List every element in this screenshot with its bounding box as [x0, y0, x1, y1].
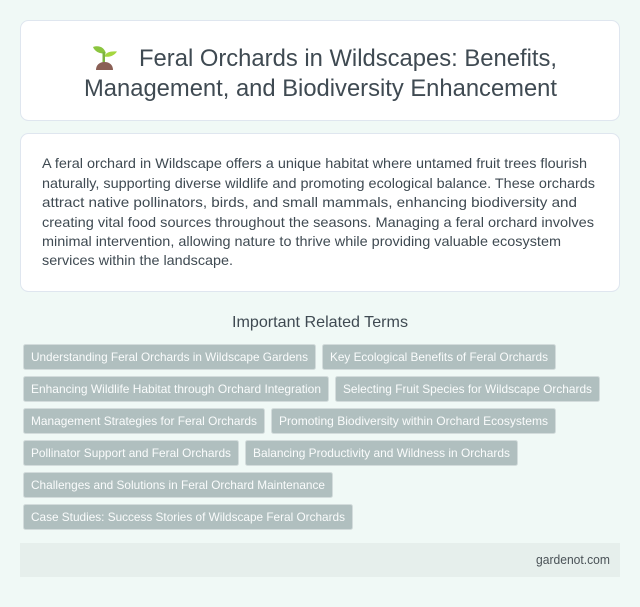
title — [84, 45, 557, 102]
panel: title card — [20, 20, 620, 120]
tag — [24, 376, 328, 402]
tag: Case Studies: Success Stories of Wildscape Feral Orchards — [31, 510, 345, 524]
tag: Key Ecological Benefits of Feral Orchards — [330, 350, 548, 364]
text block: description: services within the landscape. — [42, 252, 233, 268]
title: Management, and Biodiversity Enhancement — [84, 75, 557, 102]
tag: Balancing Productivity and Wildness in Orchards — [253, 446, 510, 460]
tag: Challenges and Solutions in Feral Orchard Maintenance — [31, 478, 325, 492]
heading: related terms: Important Related Terms — [232, 314, 408, 331]
panel: description — [20, 134, 620, 292]
tag — [24, 440, 238, 466]
title: Feral Orchards in Wildscapes: Benefits, — [139, 45, 557, 72]
tag: Selecting Fruit Species for Wildscape Orchards — [343, 382, 592, 396]
tag: Management Strategies for Feral Orchards — [31, 414, 257, 428]
text block: description: minimal intervention, allowing nature to thrive while providing valuable ecosystem — [42, 233, 561, 249]
tag — [272, 408, 556, 434]
tag: Promoting Biodiversity within Orchard Ecosystems — [279, 414, 548, 428]
tag: Pollinator Support and Feral Orchards — [31, 446, 231, 460]
text block: description: attract native pollinators, birds, and small mammals, enhancing biodiversity and — [42, 194, 577, 210]
tag — [24, 504, 352, 530]
tag — [246, 440, 518, 466]
tag — [24, 344, 316, 370]
footer — [20, 543, 620, 577]
tag: Understanding Feral Orchards in Wildscape Gardens — [31, 350, 308, 364]
text block: description: naturally, supporting diverse wildlife and promoting ecological balance. These orchards — [42, 175, 595, 191]
tag — [24, 472, 332, 498]
text block: description: creating vital food sources throughout the seasons. Managing a feral orchard involves — [42, 214, 594, 230]
text block: description: A feral orchard in Wildscape offers a unique habitat where untamed fruit trees flourish — [42, 155, 587, 171]
panel: related term tags — [24, 344, 600, 530]
tag — [24, 408, 264, 434]
tag — [322, 344, 556, 370]
tag: Enhancing Wildlife Habitat through Orchard Integration — [31, 382, 321, 396]
tag — [336, 376, 600, 402]
footer: gardenot.com — [536, 552, 610, 567]
icon: seedling — [93, 46, 117, 70]
text block: description — [42, 155, 595, 268]
